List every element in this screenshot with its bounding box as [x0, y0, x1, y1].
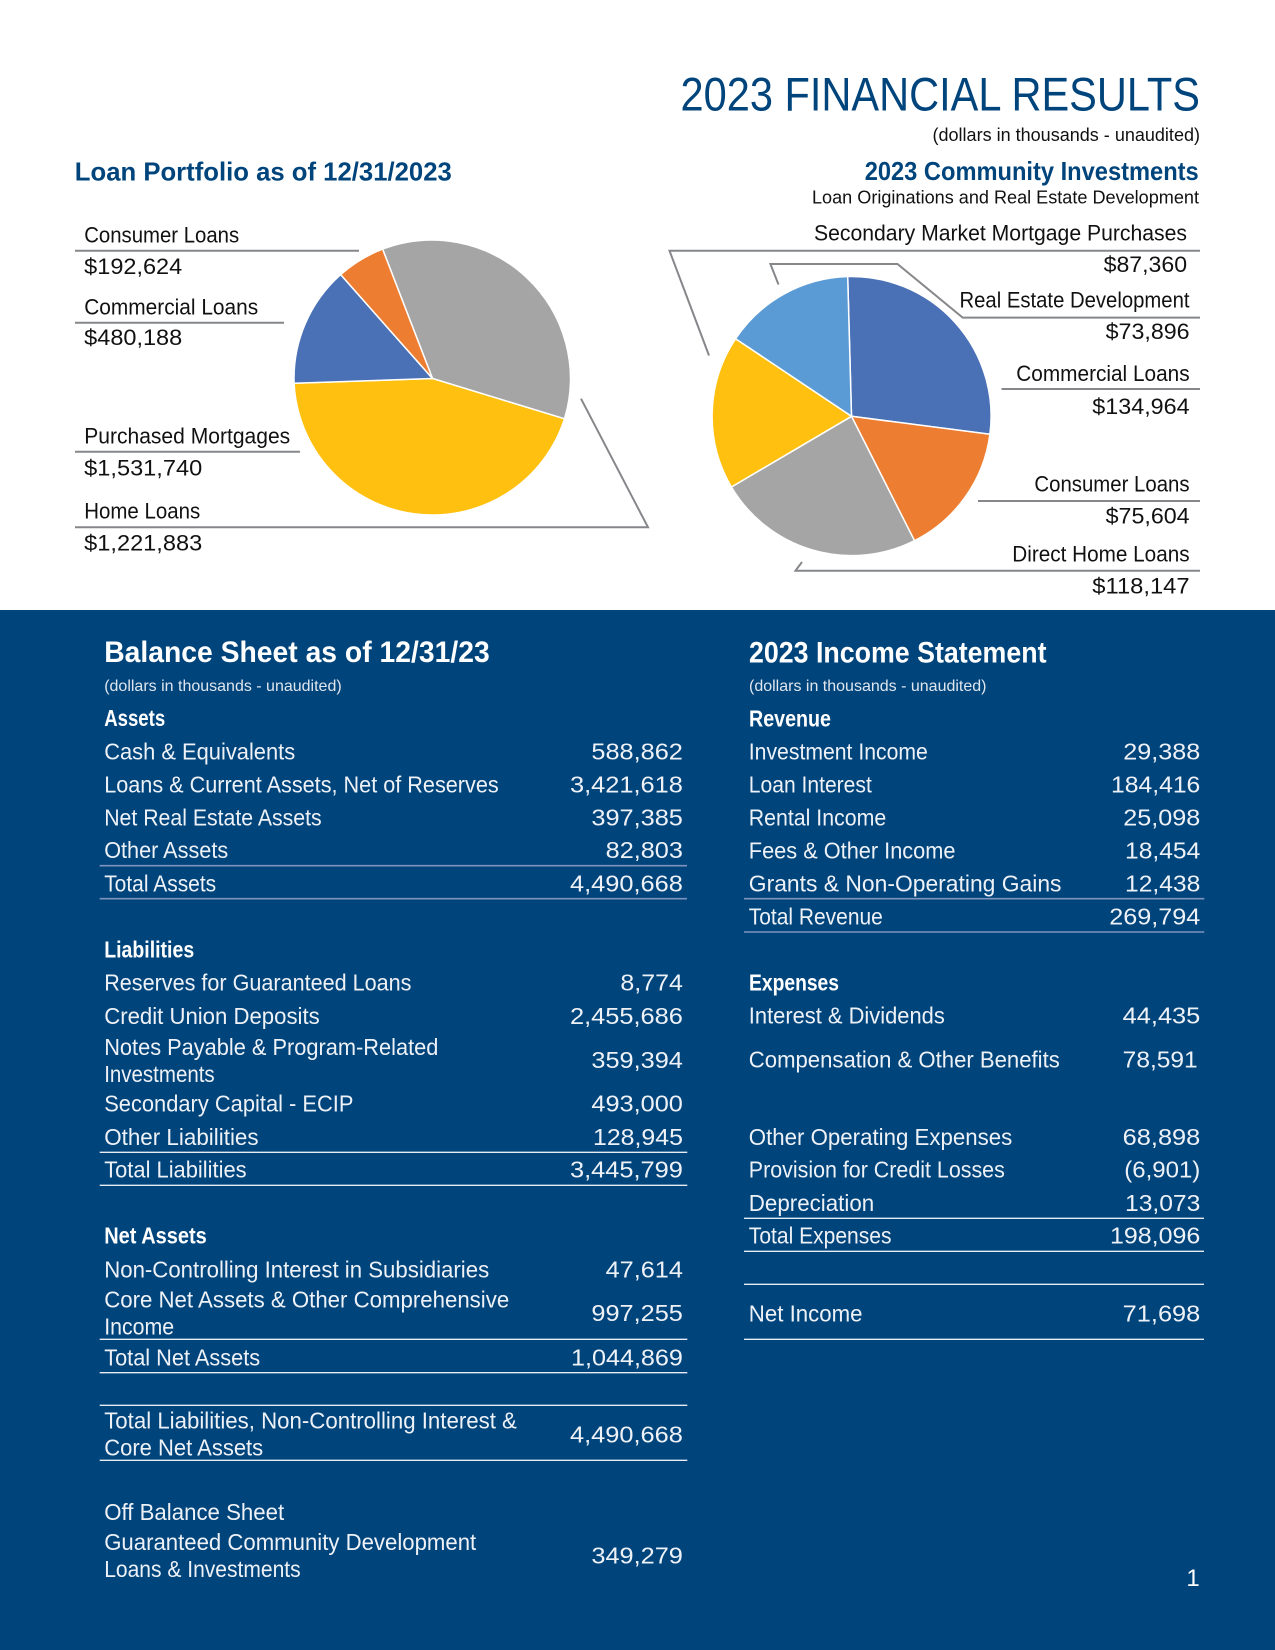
row: total expenses: [749, 1223, 1200, 1249]
callout: consumer loans: [75, 223, 359, 279]
row: total liabilities: [104, 1157, 683, 1183]
row: provision for credit losses: (6,901): [1124, 1157, 1200, 1183]
row: loan interest: [749, 772, 1200, 798]
row: net real estate assets: Net Real Estate Assets: [104, 804, 322, 830]
row: total liabilities and net assets: Total Liabilities, Non-Controlling Interest &: [104, 1407, 517, 1433]
row: rental income: 25,098: [1123, 804, 1200, 830]
callout: consumer loans: $75,604: [1106, 504, 1190, 529]
note: income statement units: (dollars in thousands - unaudited): [749, 678, 986, 695]
section: net assets: [100, 1222, 687, 1461]
subheading: community investments: Loan Originations and Real Estate Development: [812, 186, 1199, 208]
row: rental income: Rental Income: [749, 804, 886, 830]
row: notes payable: [104, 1034, 683, 1087]
callout: commercial loans: $480,188: [84, 325, 182, 350]
row: total liabilities and net assets: 4,490,668: [570, 1422, 683, 1448]
callout: direct home loans: $118,147: [1092, 573, 1190, 598]
row: core net assets: [104, 1287, 683, 1339]
callout: home loans: [75, 399, 648, 556]
row: depreciation: [749, 1190, 1200, 1216]
callout: commercial loans: Commercial Loans: [1016, 361, 1190, 386]
row: total expenses: Total Expenses: [749, 1223, 892, 1249]
callout: secondary market mortgage purchases: Secondary Market Mortgage Purchases: [814, 220, 1187, 246]
callout: real estate development: Real Estate Development: [960, 288, 1190, 312]
row: secondary capital: Secondary Capital - ECIP: [104, 1091, 354, 1117]
row: other liabilities: 128,945: [593, 1124, 683, 1150]
heading: liabilities: Liabilities: [104, 936, 194, 962]
pie chart: loan portfolio: [294, 240, 570, 515]
row: cash and equivalents: 588,862: [591, 738, 683, 764]
panel: navy statements background: [0, 610, 1275, 1650]
callout: purchased mortgages: $1,531,740: [84, 455, 202, 480]
row: total net assets: 1,044,869: [571, 1345, 683, 1371]
heading: net assets: Net Assets: [104, 1222, 207, 1248]
row: other assets: 82,803: [606, 837, 683, 863]
pie chart: community investments: [712, 276, 991, 556]
row: cash and equivalents: [104, 738, 683, 764]
row: total revenue: 269,794: [1109, 903, 1201, 929]
callout: home loans: $1,221,883: [84, 531, 202, 556]
heading: loan portfolio: Loan Portfolio as of 12/31/2023: [75, 157, 452, 187]
callout: direct home loans: [796, 542, 1200, 598]
panel: loan portfolio: [75, 157, 648, 556]
row: total revenue: Total Revenue: [749, 903, 883, 929]
row: non-controlling interest: [104, 1257, 683, 1283]
row: core net assets: Core Net Assets & Other Comprehensive: [104, 1287, 509, 1313]
row: grants: Grants & Non-Operating Gains: [749, 870, 1062, 896]
callout: commercial loans: $134,964: [1092, 394, 1190, 419]
row: grants: 12,438: [1125, 870, 1200, 896]
title: 2023 FINANCIAL RESULTS: [680, 68, 1200, 121]
row: other operating expenses: 68,898: [1123, 1124, 1200, 1150]
row: core net assets: Income: [104, 1313, 174, 1339]
row: reserves for guaranteed loans: 8,774: [620, 970, 683, 996]
callout: commercial loans: [1002, 361, 1200, 419]
panel: community investments: [670, 156, 1200, 598]
callout: commercial loans: [75, 294, 284, 350]
row: reserves for guaranteed loans: [104, 970, 683, 996]
callout: consumer loans: [978, 472, 1200, 529]
row: reserves for guaranteed loans: Reserves for Guaranteed Loans: [104, 970, 411, 996]
row: interest and dividends: [749, 1002, 1200, 1028]
row: total expenses: 198,096: [1110, 1223, 1200, 1249]
section: off balance sheet: [104, 1499, 683, 1582]
callout: consumer loans: Consumer Loans: [84, 223, 239, 248]
row: compensation: 78,591: [1123, 1047, 1198, 1073]
row: net real estate assets: 397,385: [591, 804, 683, 830]
row: other assets: Other Assets: [104, 837, 228, 863]
row: credit union deposits: Credit Union Deposits: [104, 1003, 320, 1029]
callout: real estate development: [770, 264, 1200, 344]
row: fees and other income: Fees & Other Income: [749, 837, 956, 863]
row: core net assets: 997,255: [591, 1300, 683, 1326]
row: secondary capital: [104, 1091, 683, 1117]
row: net income: [749, 1301, 1200, 1327]
row: total liabilities and net assets: Core Net Assets: [104, 1435, 263, 1461]
row: other assets: [104, 837, 683, 863]
row: depreciation: Depreciation: [749, 1190, 874, 1216]
row: depreciation: 13,073: [1125, 1190, 1200, 1216]
callout: direct home loans: Direct Home Loans: [1012, 542, 1190, 567]
row: investment income: Investment Income: [749, 738, 928, 764]
heading: expenses: Expenses: [749, 970, 839, 996]
callout: purchased mortgages: [75, 423, 300, 480]
row: total revenue: [749, 903, 1201, 929]
row: net income: Net Income: [749, 1301, 862, 1327]
callout: consumer loans: Consumer Loans: [1034, 472, 1190, 497]
row: provision for credit losses: Provision for Credit Losses: [749, 1157, 1005, 1183]
panel: income statement: [744, 637, 1204, 1339]
callout: secondary market mortgage purchases: $87,360: [1104, 252, 1187, 277]
row: interest and dividends: 44,435: [1123, 1002, 1200, 1028]
row: cash and equivalents: Cash & Equivalents: [104, 738, 295, 764]
row: total liabilities and net assets: [104, 1407, 683, 1461]
heading: revenue: Revenue: [749, 706, 831, 732]
row: credit union deposits: [104, 1003, 683, 1029]
row: credit union deposits: 2,455,686: [570, 1003, 683, 1029]
row: total liabilities: Total Liabilities: [104, 1157, 247, 1183]
callout: home loans: Home Loans: [84, 498, 200, 523]
row: provision for credit losses: [749, 1157, 1200, 1183]
row: net income: 71,698: [1123, 1301, 1200, 1327]
callout: real estate development: $73,896: [1106, 319, 1190, 344]
row: notes payable: Investments: [104, 1061, 215, 1087]
row: total net assets: [104, 1345, 683, 1371]
row: fees and other income: [749, 837, 1201, 863]
row: grants: [749, 870, 1200, 896]
section: revenue: [744, 706, 1204, 932]
callout: purchased mortgages: Purchased Mortgages: [84, 423, 290, 448]
section: assets: [100, 705, 687, 899]
note: balance sheet units: (dollars in thousands - unaudited): [104, 678, 342, 695]
row: notes payable: Notes Payable & Program-Related: [104, 1034, 438, 1060]
row: other liabilities: [104, 1124, 683, 1150]
row: total net assets: Total Net Assets: [104, 1345, 260, 1371]
row: interest and dividends: Interest & Dividends: [749, 1002, 945, 1028]
row: other operating expenses: Other Operating Expenses: [749, 1124, 1012, 1150]
row: loans and current assets: Loans & Current Assets, Net of Reserves: [104, 772, 499, 798]
row: secondary capital: 493,000: [591, 1091, 683, 1117]
row: guaranteed community development: 349,279: [591, 1542, 683, 1568]
row: total assets: [104, 870, 683, 896]
row: loan interest: 184,416: [1111, 772, 1200, 798]
page number: 1: [1186, 1565, 1200, 1592]
callout: consumer loans: $192,624: [84, 254, 182, 279]
callout: secondary market mortgage purchases: [670, 220, 1200, 356]
heading: income statement: 2023 Income Statement: [749, 637, 1046, 670]
heading: balance sheet: Balance Sheet as of 12/31/23: [104, 636, 490, 669]
row: total liabilities: 3,445,799: [570, 1157, 683, 1183]
title note: (dollars in thousands - unaudited): [932, 125, 1200, 145]
section: liabilities: [100, 936, 687, 1185]
row: guaranteed community development: [104, 1529, 683, 1582]
row: net real estate assets: [104, 804, 683, 830]
heading: assets: Assets: [104, 705, 165, 731]
row: total assets: 4,490,668: [570, 870, 683, 896]
row: total assets: Total Assets: [104, 870, 216, 896]
row: loan interest: Loan Interest: [749, 772, 872, 798]
label: off balance sheet: Off Balance Sheet: [104, 1499, 285, 1525]
row: guaranteed community development: Guaranteed Community Development: [104, 1529, 477, 1555]
callout: commercial loans: Commercial Loans: [84, 294, 258, 319]
row: other operating expenses: [749, 1124, 1200, 1150]
row: guaranteed community development: Loans & Investments: [104, 1556, 301, 1582]
row: non-controlling interest: Non-Controlling Interest in Subsidiaries: [104, 1257, 489, 1283]
section: expenses: [744, 970, 1204, 1339]
panel: balance sheet: [100, 636, 687, 1582]
row: investment income: [749, 738, 1200, 764]
row: rental income: [749, 804, 1200, 830]
row: compensation: Compensation & Other Benefits: [749, 1047, 1060, 1073]
row: notes payable: 359,394: [591, 1047, 683, 1073]
row: fees and other income: 18,454: [1125, 837, 1201, 863]
row: investment income: 29,388: [1123, 738, 1200, 764]
row: other liabilities: Other Liabilities: [104, 1124, 259, 1150]
row: loans and current assets: 3,421,618: [570, 772, 683, 798]
heading: community investments: 2023 Community Investments: [865, 156, 1199, 186]
row: non-controlling interest: 47,614: [606, 1257, 683, 1283]
